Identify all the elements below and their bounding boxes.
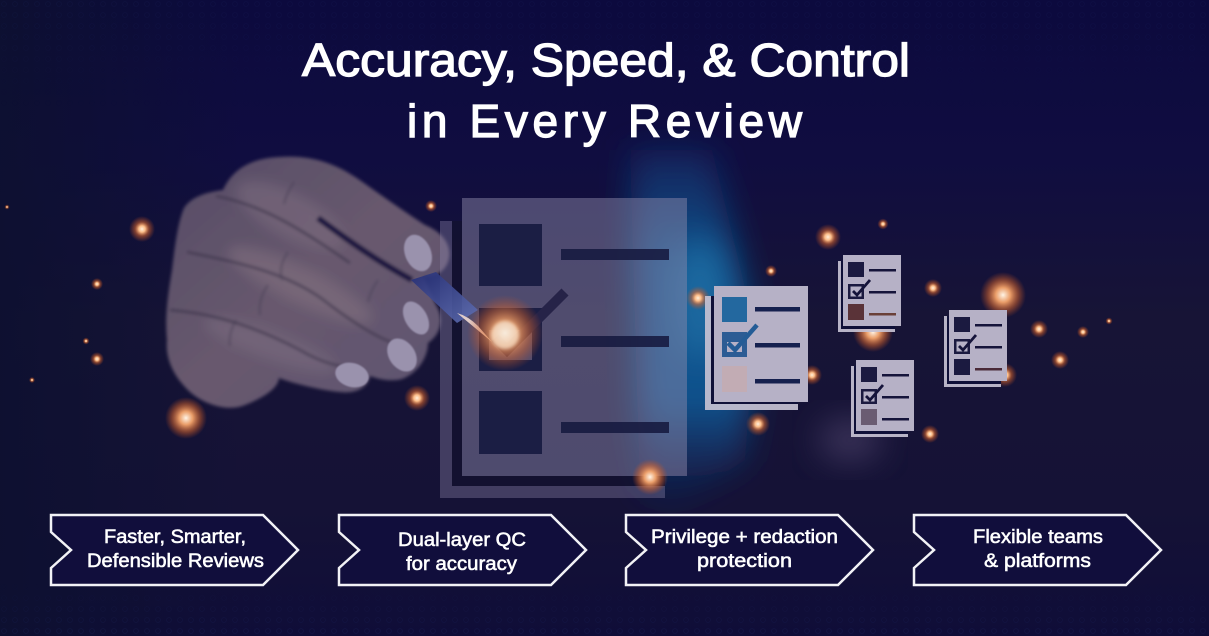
arrow label: Faster, Smarter, Defensible Reviews	[51, 515, 298, 585]
arrow label: Privilege + redaction protection	[626, 515, 873, 585]
main checklist document	[440, 198, 687, 498]
arrow label: Flexible teams & platforms: & platforms	[984, 551, 1091, 572]
back sheet	[440, 221, 665, 498]
fingernails	[332, 231, 437, 391]
arrow label: Faster, Smarter, Defensible Reviews: Faster, Smarter,	[104, 527, 246, 548]
title	[302, 34, 910, 147]
icon: small checklist bottom	[851, 360, 914, 437]
line 1	[561, 249, 669, 260]
arrow label: Privilege + redaction protection: protection	[697, 551, 792, 572]
arrow label: Faster, Smarter, Defensible Reviews: Defensible Reviews	[87, 551, 264, 572]
glowing point at check box	[467, 295, 543, 371]
arrow label: Dual-layer QC for accuracy: for accuracy	[406, 554, 518, 575]
hand holding pen	[166, 157, 449, 408]
icon: large checklist	[705, 286, 808, 410]
glowing particles	[4, 200, 1112, 495]
arrow label: Privilege + redaction protection: Privilege + redaction	[651, 527, 838, 548]
arrow label: Dual-layer QC for accuracy	[339, 515, 586, 585]
line 3	[561, 422, 669, 433]
title: Accuracy, Speed, & Control	[302, 34, 910, 86]
line 2	[561, 336, 669, 347]
title: in Every Review	[407, 95, 803, 147]
icon: small checklist top	[838, 255, 901, 332]
icon: small checklist right	[944, 310, 1007, 387]
check mark	[495, 292, 565, 350]
checkbox 3	[479, 391, 542, 454]
checkbox 2	[479, 308, 542, 371]
finger shading	[227, 167, 353, 263]
front sheet	[462, 198, 687, 476]
dark gap	[452, 221, 665, 486]
arrow label: Flexible teams & platforms	[914, 515, 1161, 585]
checkbox 1	[479, 224, 542, 286]
arrow label: Flexible teams & platforms: Flexible teams	[973, 527, 1103, 548]
pen tip	[411, 272, 492, 342]
arrow label: Dual-layer QC for accuracy: Dual-layer QC	[398, 530, 526, 551]
